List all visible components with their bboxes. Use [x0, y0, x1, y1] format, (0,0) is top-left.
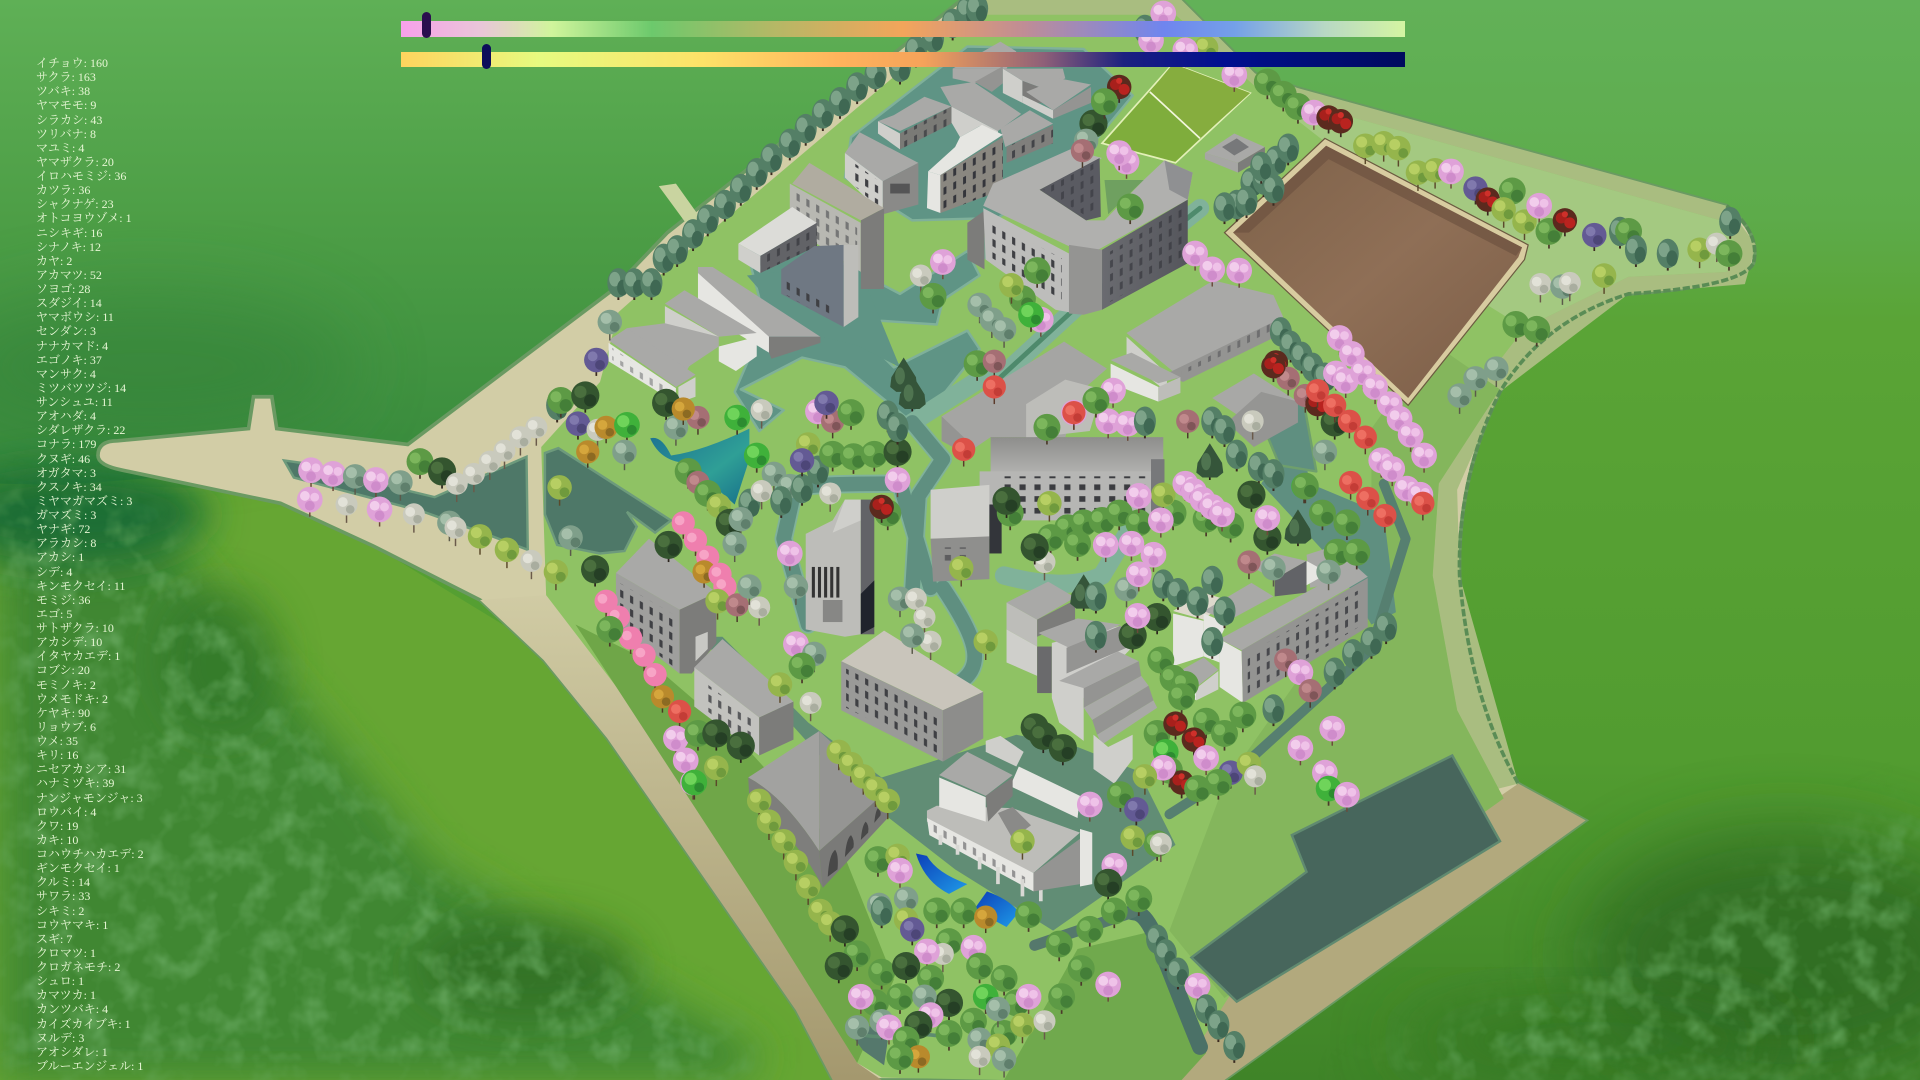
gradient slider 2 — [401, 52, 1405, 67]
tree species count list: サクラ: 163 — [36, 70, 96, 84]
tree species count list: ヤナギ: 72 — [36, 522, 90, 536]
tree species count list: キンモクセイ: 11 — [36, 579, 125, 593]
tree species count list: カイズカイブキ: 1 — [36, 1016, 131, 1030]
tree species count list: ナナカマド: 4 — [36, 338, 108, 352]
gradient slider 1 — [401, 21, 1405, 37]
trees: chapel hedge rows — [747, 740, 913, 942]
tree species count list: クロマツ: 1 — [36, 946, 96, 960]
tree species count list: オトコヨウゾメ: 1 — [36, 211, 132, 225]
tree species count list: ハナミヅキ: 39 — [36, 776, 114, 790]
trees: southwest roadside row — [297, 310, 640, 590]
tree species count list: シャクナゲ: 23 — [36, 197, 114, 211]
tree species count list: イチョウ: 160 — [36, 56, 108, 70]
building: chapel — [748, 731, 888, 888]
tree species count list: ツリバナ: 8 — [36, 127, 96, 141]
sports ground: lawn pitch — [1102, 64, 1250, 163]
tree species count list: ケヤキ: 90 — [36, 706, 90, 720]
tree species count list: キリ: 16 — [36, 748, 78, 762]
tree species count list: ミツバツツジ: 14 — [36, 381, 126, 395]
tree species count list: スダジイ: 14 — [36, 296, 102, 310]
tree species count list: ヌルデ: 3 — [36, 1031, 84, 1045]
tree species count list: ヤマモモ: 9 — [36, 98, 96, 112]
trees: south-central groves — [1010, 612, 1397, 1063]
tree species count list: ツバキ: 38 — [36, 84, 90, 98]
tree species count list: アカマツ: 52 — [36, 268, 102, 282]
building: east laboratory — [1173, 546, 1368, 703]
tree species count list: スギ: 7 — [36, 932, 72, 946]
tree species count list: サトザクラ: 10 — [36, 621, 114, 635]
tree species count list: モミノキ: 2 — [36, 678, 96, 692]
buildings — [609, 42, 1368, 901]
tree species count list: コブシ: 20 — [36, 663, 90, 677]
building: gallery tower — [806, 500, 874, 637]
ponds — [650, 429, 1019, 927]
tree species count list: カンツバキ: 4 — [36, 1002, 108, 1016]
tree species count list: ニシキギ: 16 — [36, 226, 102, 240]
trees: central north — [910, 1, 1299, 348]
tree species count list: エゴ: 5 — [36, 607, 72, 621]
tree species count list: サンシュユ: 11 — [36, 395, 113, 409]
tree species count list: ブルーエンジェル: 1 — [36, 1059, 143, 1073]
tree species count list: リョウブ: 6 — [36, 720, 96, 734]
building: southwest hall — [694, 639, 793, 756]
building: theater block — [931, 485, 1002, 582]
tree species count list: ギンモクセイ: 1 — [36, 861, 120, 875]
tree species count list: ガマズミ: 3 — [36, 508, 96, 522]
tree species count list: シダレザクラ: 22 — [36, 423, 125, 437]
building: stepped terrace block — [1007, 582, 1157, 784]
building: southwest slab — [616, 539, 716, 673]
trees: south arboretum cluster — [825, 887, 1056, 1078]
tree species count list: クロガネモチ: 2 — [36, 960, 120, 974]
tree species count list: モミジ: 36 — [36, 593, 90, 607]
tree species count list: シュロ: 1 — [36, 974, 84, 988]
tree species count list: ナンジャモンジャ: 3 — [36, 790, 143, 804]
tree species count list: クルミ: 14 — [36, 875, 90, 889]
building: west slab — [790, 163, 884, 289]
tree species count list: ヤマボウシ: 11 — [36, 310, 114, 324]
tree species count list: マンサク: 4 — [36, 367, 96, 381]
tree species count list: イロハモミジ: 36 — [36, 169, 126, 183]
tree species count list: カツラ: 36 — [36, 183, 90, 197]
building: pyramid-roof hall — [1212, 373, 1298, 447]
tree species count list: ヤマザクラ: 20 — [36, 155, 114, 169]
tree species count list: シラカシ: 43 — [36, 112, 102, 126]
trees: pond surroundings — [652, 350, 1006, 562]
tree species count list: カヤ: 2 — [36, 254, 72, 268]
tree species count list: ウメ: 35 — [36, 734, 78, 748]
trees: southwest slab row — [594, 511, 998, 800]
tree species count list: コウヤマキ: 1 — [36, 918, 108, 932]
tree species count list: マユミ: 4 — [36, 141, 84, 155]
tree species count list: オガタマ: 3 — [36, 466, 96, 480]
building: central-north U block — [967, 149, 1193, 315]
building: central stepped block — [942, 342, 1107, 453]
building: dark annex — [738, 207, 858, 327]
tree species count list: センダン: 3 — [36, 324, 96, 338]
building: west lecture hall — [609, 267, 820, 403]
tree species count list: アラカシ: 8 — [36, 536, 96, 550]
tree species count list: ミヤマガマズミ: 3 — [36, 494, 132, 508]
tree species count list: カマツカ: 1 — [36, 988, 96, 1002]
tree species count list: ウメモドキ: 2 — [36, 692, 108, 706]
teal paved paths — [686, 47, 1406, 1065]
tree species count list: ロウバイ: 4 — [36, 805, 96, 819]
tree species count list: アオシダレ: 1 — [36, 1045, 108, 1059]
building: library block — [841, 631, 983, 762]
tree species count list: クワ: 19 — [36, 819, 78, 833]
tree species count list: クスノキ: 34 — [36, 480, 102, 494]
building: north complex — [845, 42, 1091, 214]
tree species count list: エゴノキ: 37 — [36, 353, 102, 367]
trees: northwest conifer row — [607, 0, 988, 300]
building: south media center — [927, 736, 1092, 901]
tree species count list: ニセアカシア: 31 — [36, 762, 126, 776]
building: east long hall — [1111, 280, 1283, 402]
slider 1 handle — [422, 12, 431, 38]
building: small courtyard pavilion — [1205, 133, 1265, 173]
building: central grid block — [980, 437, 1164, 520]
parking lots — [284, 448, 1500, 1002]
tree species count list: サワラ: 33 — [36, 889, 90, 903]
trees: field-side pink and red rows — [1264, 317, 1437, 533]
tree species count list: イタヤカエデ: 1 — [36, 649, 120, 663]
tree species count list — [36, 56, 144, 1073]
tree species count list: アカシ: 1 — [36, 550, 84, 564]
slider 2 handle — [482, 44, 491, 69]
tree species count list: シキミ: 2 — [36, 904, 84, 918]
trees: northeast perimeter row — [1254, 69, 1742, 414]
tree species count list: コナラ: 179 — [36, 437, 96, 451]
tree species count list: カキ: 10 — [36, 833, 78, 847]
tree species count list: ソヨゴ: 28 — [36, 282, 90, 296]
sports ground: brown field — [1224, 138, 1528, 405]
tree species count list: コハウチハカエデ: 2 — [36, 847, 144, 861]
tree species count list: シナノキ: 12 — [36, 240, 101, 254]
tree species count list: アカシデ: 10 — [36, 635, 102, 649]
tree species count list: アオハダ: 4 — [36, 409, 96, 423]
tree species count list: クヌギ: 46 — [36, 452, 90, 466]
trees: central forest — [992, 354, 1370, 702]
tree species count list: シデ: 4 — [36, 564, 72, 578]
